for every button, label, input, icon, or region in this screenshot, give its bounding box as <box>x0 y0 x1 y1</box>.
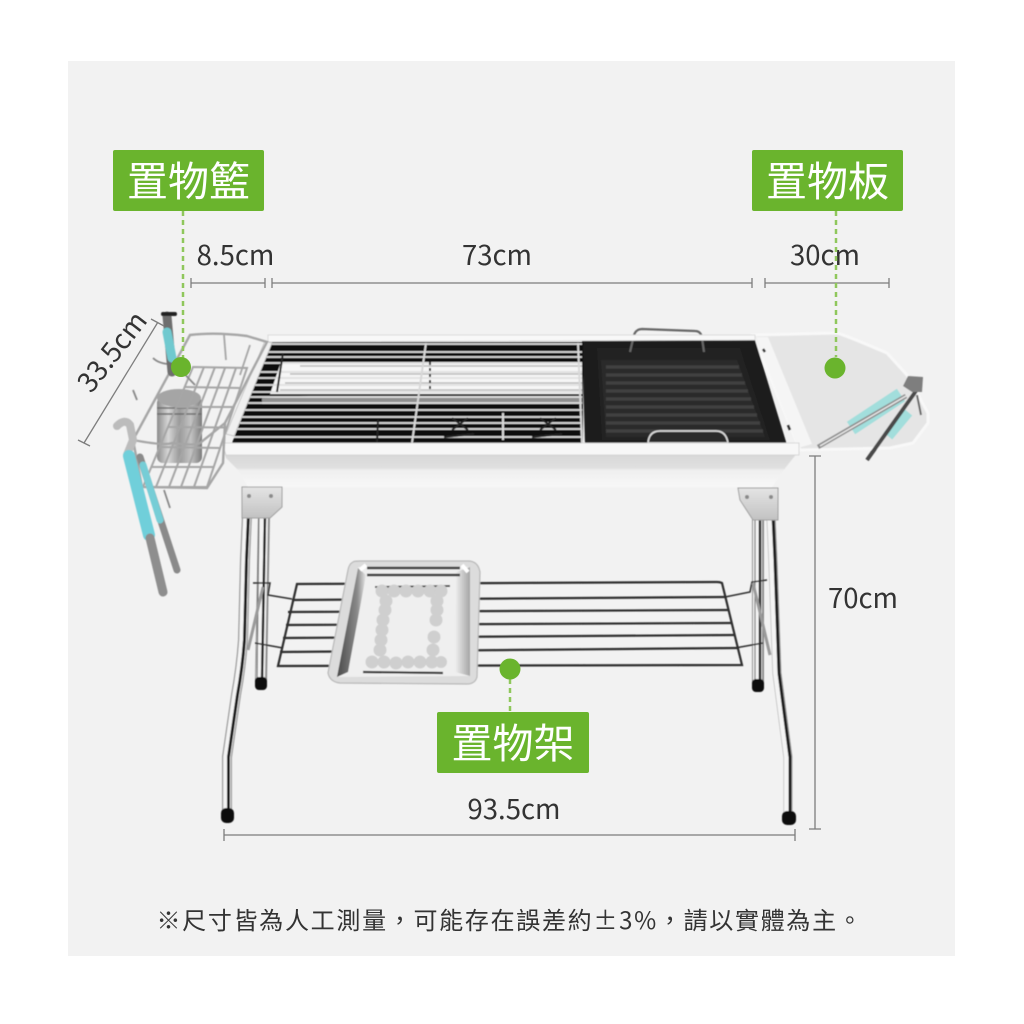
callout: side board: 置物板 <box>766 148 889 208</box>
callout: lower shelf: 置物架 <box>452 710 574 770</box>
dimension: 30cm <box>765 233 889 288</box>
dimension: 8.5cm <box>191 233 274 288</box>
dimension: basket depth 33.5cm: 33.5cm <box>66 301 155 399</box>
charcoal wire grate <box>232 342 583 443</box>
left leg bracket <box>242 487 282 518</box>
left front leg <box>221 515 248 823</box>
steel tray <box>328 561 480 684</box>
grill frame and body <box>222 335 799 487</box>
callout: basket: 置物籃 <box>127 148 250 208</box>
dimension: width 93.5cm: 93.5cm <box>468 787 560 827</box>
dimension: 8.5cm: 8.5cm <box>197 233 274 273</box>
dimension: height 70cm: 70cm <box>828 576 898 616</box>
right leg bracket <box>738 488 778 520</box>
background panel <box>68 61 955 956</box>
lower wire shelf <box>248 580 770 666</box>
right rear leg <box>752 515 764 692</box>
salt shaker <box>157 389 202 463</box>
grill product illustration <box>117 314 928 825</box>
griddle plate <box>582 329 787 445</box>
tongs on basket <box>117 314 177 592</box>
right front leg <box>770 515 796 825</box>
tray embossed dots <box>366 584 448 670</box>
griddle handles <box>630 329 704 352</box>
dimension: basket depth 33.5cm <box>66 301 164 446</box>
right side shelf board <box>753 333 928 450</box>
footnote: ※尺寸皆為人工測量，可能存在誤差約±3%，請以實體為主。 <box>156 901 864 936</box>
callout: side board <box>752 148 903 378</box>
callout: lower shelf <box>437 658 589 773</box>
dimension: height 70cm <box>809 456 898 829</box>
dimension: 73cm: 73cm <box>462 233 532 273</box>
dimension: 73cm <box>272 233 752 288</box>
dimension: width 93.5cm <box>224 787 795 841</box>
right tongs <box>818 376 923 460</box>
dimension: 30cm: 30cm <box>790 233 860 273</box>
callout: basket <box>113 148 264 377</box>
hanging wire basket <box>133 334 267 508</box>
left rear leg <box>255 515 267 690</box>
